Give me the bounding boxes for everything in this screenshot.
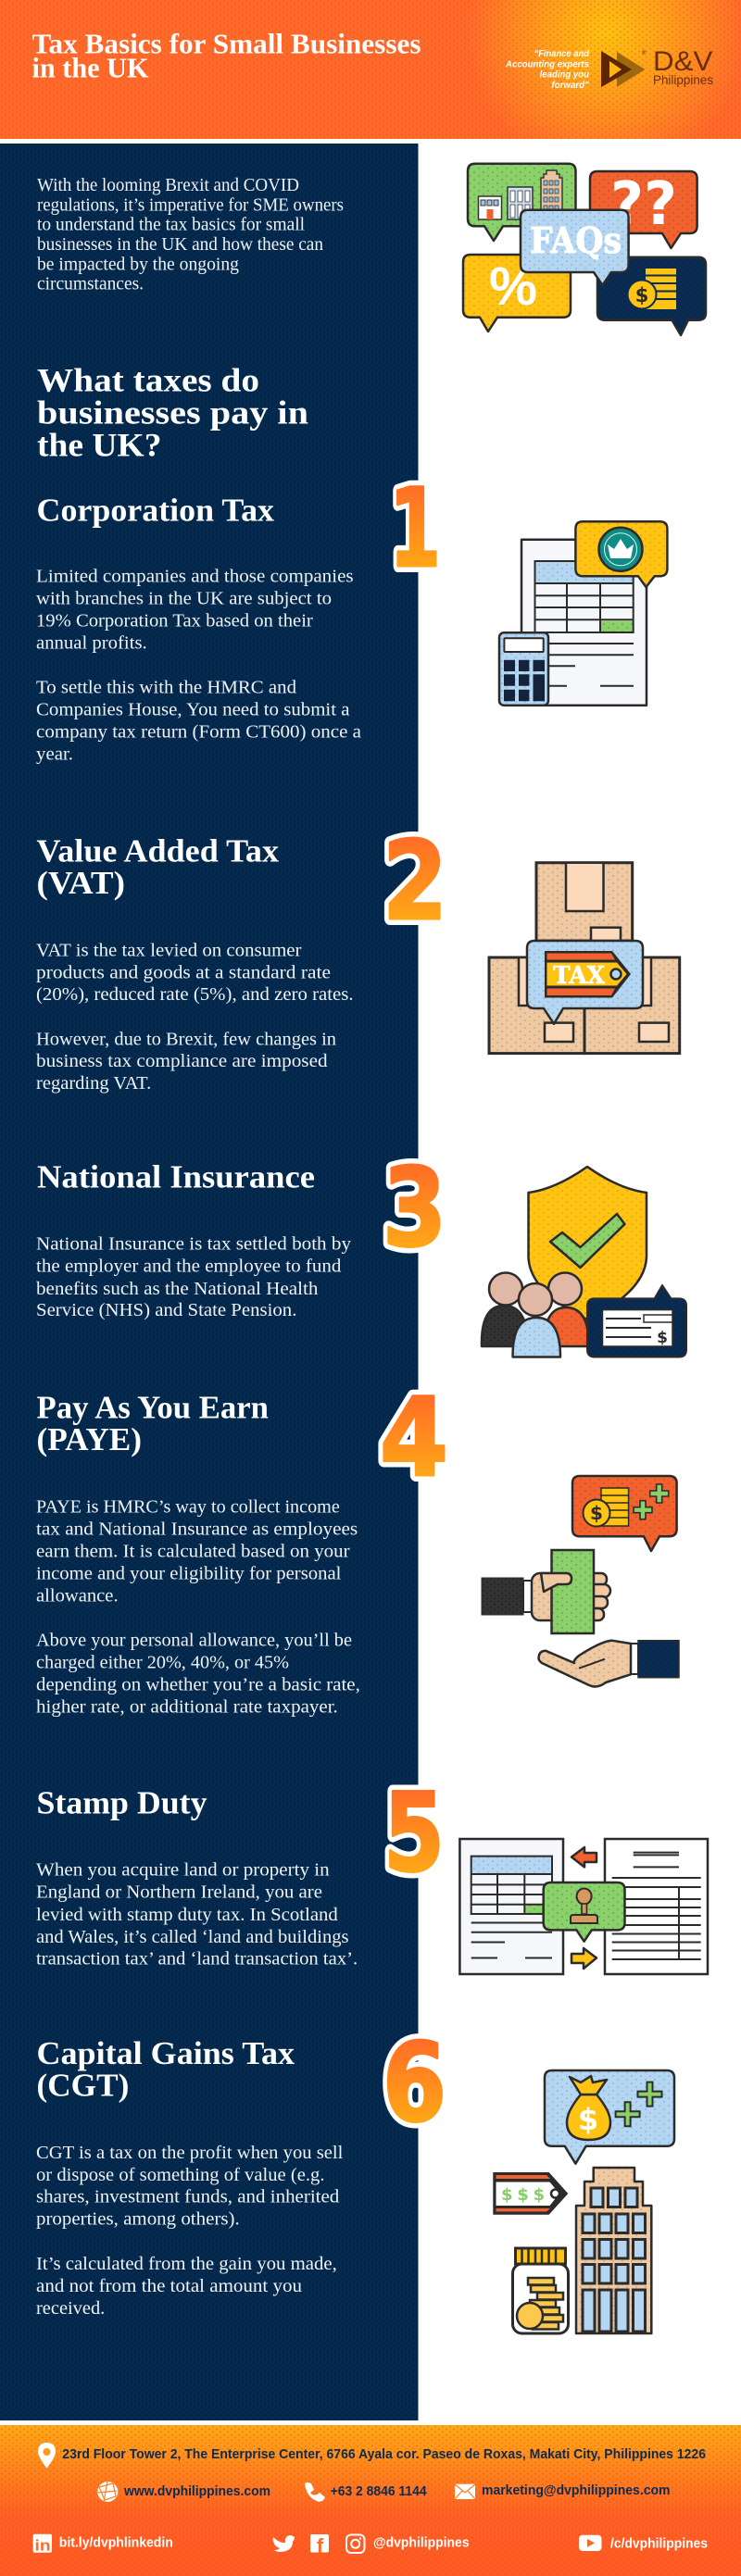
heading: what taxes do businesses pay: businesses pay in bbox=[37, 394, 308, 431]
number 1: 1 bbox=[389, 465, 441, 592]
footer: Facebook icon bbox=[310, 2534, 329, 2557]
section 5: body text: When you acquire land or property in bbox=[36, 1859, 330, 1880]
orange bubble with coins and plus signs: $ bbox=[590, 1502, 603, 1524]
section 1: heading Corporation Tax: Corporation Tax bbox=[37, 493, 275, 529]
section 5: body text: England or Northern Ireland, you are bbox=[36, 1882, 322, 1903]
logo: D&V Philippines: ® bbox=[642, 50, 647, 56]
shield with check mark bbox=[528, 1167, 647, 1319]
number 3: 3 bbox=[383, 1144, 446, 1271]
blue bubble with tax tag: TAX bbox=[553, 962, 606, 990]
section 2: body text: business tax compliance are imposed bbox=[36, 1051, 328, 1071]
footer: Instagram with handle bbox=[346, 2535, 470, 2553]
building bbox=[576, 2168, 651, 2333]
footer: Facebook icon: f bbox=[317, 2535, 324, 2557]
arrows bbox=[571, 1847, 597, 1969]
section 6: body text: or dispose of something of value (e.g. bbox=[36, 2165, 325, 2185]
section 3: body text: Service (NHS) and State Pension. bbox=[36, 1300, 296, 1320]
section 5: body text: levied with stamp duty tax. In Scotland bbox=[36, 1905, 338, 1925]
right document bbox=[605, 1839, 708, 1974]
section 6: body text: properties, among others). bbox=[36, 2209, 240, 2230]
green bubble with stamp bbox=[544, 1882, 624, 1942]
heading: what taxes do businesses pay bbox=[37, 362, 308, 463]
number 5: 5 bbox=[383, 1769, 445, 1896]
section 1: body text: 19% Corporation Tax based on their bbox=[36, 610, 313, 631]
section 6: body text: shares, investment funds, and inherited bbox=[36, 2187, 339, 2207]
company tagline: forward” bbox=[551, 80, 590, 91]
number 1 bbox=[389, 465, 441, 592]
icon: boxes with tax tag bbox=[489, 863, 680, 1054]
number 4: 4 bbox=[380, 1374, 448, 1501]
footer: email: marketing@dvphilippines.com bbox=[482, 2482, 671, 2498]
section 3: body text: National Insurance is tax settled both by bbox=[36, 1234, 351, 1255]
intro text: be impacted by the ongoing bbox=[37, 256, 239, 275]
title bbox=[31, 27, 421, 83]
section 1: body text: Limited companies and those companies bbox=[36, 566, 354, 586]
footer band bbox=[0, 2425, 741, 2576]
yellow bubble with crown seal bbox=[575, 521, 667, 587]
company tagline: leading you bbox=[540, 69, 590, 81]
section 2: body text bbox=[36, 940, 354, 1094]
section 2: heading VAT: (VAT) bbox=[37, 865, 125, 901]
intro text: circumstances. bbox=[37, 274, 144, 294]
section 1: body text: year. bbox=[36, 744, 73, 764]
blue bubble with FAQs: FAQs bbox=[530, 219, 622, 261]
company tagline: “Finance and bbox=[534, 48, 590, 59]
section 2: heading VAT: Value Added Tax bbox=[37, 833, 280, 869]
footer: YouTube bbox=[579, 2535, 708, 2552]
price tag: $$$ bbox=[501, 2185, 545, 2205]
company tagline bbox=[505, 48, 590, 91]
section 4: body text: tax and National Insurance as employees bbox=[36, 1519, 358, 1539]
section 6: body text: It’s calculated from the gain you made, bbox=[36, 2254, 337, 2274]
three people bbox=[482, 1272, 589, 1357]
section 2: body text: However, due to Brexit, few changes in bbox=[36, 1029, 336, 1049]
yellow bubble with percent: % bbox=[489, 256, 537, 317]
section 2: heading VAT bbox=[37, 833, 280, 901]
lower receiving hand bbox=[539, 1641, 679, 1686]
footer: LinkedIn: bit.ly/dvphlinkedin bbox=[59, 2535, 173, 2551]
navy bubble with cheque: $ bbox=[657, 1329, 668, 1347]
section 6: body text: received. bbox=[36, 2298, 105, 2319]
orange bubble with question marks bbox=[590, 170, 697, 248]
orange bubble with question marks: ?? bbox=[610, 170, 677, 239]
title: Tax Basics for Small Businesses bbox=[31, 27, 421, 59]
section 1: body text: To settle this with the HMRC and bbox=[36, 677, 296, 697]
heading: what taxes do businesses pay: the UK? bbox=[37, 426, 161, 463]
orange bubble with coins and plus signs bbox=[572, 1476, 677, 1551]
panel: navy text column bbox=[0, 144, 419, 2420]
footer: address with pin icon bbox=[38, 2443, 706, 2469]
section 4: body text bbox=[36, 1496, 360, 1717]
section 6: body text bbox=[36, 2143, 344, 2319]
footer: LinkedIn: in bbox=[35, 2537, 50, 2554]
coin jar bbox=[513, 2248, 569, 2333]
number 3: 3 bbox=[383, 1144, 446, 1271]
section 5: body text: and Wales, it’s called ‘land and buildings bbox=[36, 1927, 349, 1947]
blue bubble with money bag bbox=[545, 2070, 674, 2164]
section 4: body text: allowance. bbox=[36, 1585, 119, 1606]
footer: Twitter icon bbox=[273, 2535, 295, 2552]
intro text: to understand the tax basics for small bbox=[37, 215, 306, 235]
logo: D&V Philippines bbox=[601, 46, 713, 87]
heading: what taxes do businesses pay: What taxes do bbox=[37, 362, 259, 399]
section 1: body text: Companies House, You need to submit a bbox=[36, 699, 350, 719]
title: in the UK bbox=[31, 51, 148, 83]
icon: money bag, price tag, coin jar and building bbox=[493, 2070, 674, 2333]
section 6: body text: and not from the total amount you bbox=[36, 2276, 302, 2296]
intro text: With the looming Brexit and COVID bbox=[37, 176, 299, 195]
green bubble with buildings bbox=[468, 164, 576, 241]
section 5: heading Stamp Duty: Stamp Duty bbox=[37, 1784, 207, 1820]
number 5: 5 bbox=[383, 1769, 445, 1896]
footer: website: www.dvphilippines.com bbox=[123, 2483, 270, 2499]
left document bbox=[459, 1839, 563, 1974]
section 1: body text bbox=[36, 566, 361, 764]
intro text bbox=[37, 176, 344, 294]
price tag bbox=[493, 2172, 568, 2215]
calculator bbox=[499, 632, 548, 706]
section 4: body text: income and your eligibility for personal bbox=[36, 1563, 342, 1583]
footer: YouTube: /c/dvphilippines bbox=[610, 2536, 708, 2552]
section 1: body text: company tax return (Form CT600) once a bbox=[36, 721, 361, 742]
number 6: 6 bbox=[383, 2020, 446, 2146]
number 2: 2 bbox=[383, 818, 447, 944]
section 4: body text: earn them. It is calculated based on your bbox=[36, 1541, 350, 1561]
logo: D&V Philippines: D&V bbox=[653, 46, 712, 77]
navy bubble with coins: $ bbox=[635, 284, 648, 306]
section 2: body text: VAT is the tax levied on consumer bbox=[36, 940, 302, 960]
section 5: body text bbox=[36, 1859, 358, 1970]
blue bubble with FAQs bbox=[521, 210, 629, 285]
section 6: body text: CGT is a tax on the profit when you sell bbox=[36, 2143, 344, 2163]
section 3: heading National Insurance: National Insurance bbox=[37, 1159, 315, 1195]
icon: hands exchanging money bbox=[482, 1476, 679, 1686]
number 6: 6 bbox=[383, 2020, 446, 2146]
section 4: heading PAYE: Pay As You Earn bbox=[37, 1389, 269, 1425]
section 4: body text: higher rate, or additional rate taxpayer. bbox=[36, 1696, 338, 1717]
section 6: heading CGT: Capital Gains Tax bbox=[37, 2035, 295, 2071]
footer: Instagram with handle: @dvphilippines bbox=[373, 2535, 470, 2551]
section 4: body text: Above your personal allowance, you’ll be bbox=[36, 1630, 352, 1650]
number 1: 1 bbox=[389, 465, 441, 592]
number 2: 2 bbox=[383, 818, 447, 944]
section 1: body text: with branches in the UK are subject to bbox=[36, 588, 332, 608]
section 6: heading CGT: (CGT) bbox=[37, 2067, 129, 2104]
upper hand holding bill bbox=[482, 1550, 610, 1633]
section 4: body text: depending on whether you’re a basic rate, bbox=[36, 1674, 360, 1694]
icon: shield with people and cheque bbox=[482, 1167, 686, 1357]
logo: D&V Philippines: Philippines bbox=[653, 72, 713, 87]
number 4: 4 bbox=[380, 1374, 448, 1501]
company tagline: Accounting experts bbox=[505, 58, 589, 69]
section 4: heading PAYE bbox=[37, 1389, 269, 1457]
icon: FAQ speech bubbles bbox=[463, 164, 706, 335]
yellow bubble with percent bbox=[463, 255, 571, 331]
section 3: body text: the employer and the employee to fund bbox=[36, 1256, 341, 1276]
section 2: body text: (20%), reduced rate (5%), and zero rates. bbox=[36, 984, 354, 1005]
blue bubble with tax tag bbox=[527, 941, 643, 1024]
section 5: body text: transaction tax’ and ‘land transaction tax’. bbox=[36, 1949, 358, 1970]
section 4: heading PAYE: (PAYE) bbox=[37, 1421, 142, 1457]
section 1: body text: annual profits. bbox=[36, 632, 147, 653]
intro text: regulations, it’s imperative for SME owners bbox=[37, 195, 344, 215]
header banner bbox=[0, 0, 741, 139]
blue bubble with money bag: $ bbox=[578, 2102, 598, 2137]
footer: address with pin icon: 23rd Floor Tower 2, The Enterprise Center, 6766 Ayala cor. Paseo de Roxas, Makati City, Philippines 1226 bbox=[62, 2446, 706, 2462]
footer: phone bbox=[305, 2482, 427, 2502]
section 6: heading CGT bbox=[37, 2035, 295, 2104]
icon: documents with stamp bbox=[459, 1839, 708, 1974]
section 2: body text: regarding VAT. bbox=[36, 1073, 151, 1094]
section 3: body text: benefits such as the National Health bbox=[36, 1279, 318, 1299]
icon: tax form with calculator and crown bubble bbox=[499, 521, 667, 706]
navy bubble with cheque bbox=[587, 1285, 686, 1357]
section 2: body text: products and goods at a standard rate bbox=[36, 962, 331, 982]
footer: website bbox=[97, 2482, 270, 2502]
section 3: body text bbox=[36, 1234, 351, 1320]
footer: phone: +63 2 8846 1144 bbox=[331, 2483, 427, 2499]
footer: LinkedIn bbox=[33, 2534, 173, 2554]
intro text: businesses in the UK and how these can bbox=[37, 235, 323, 255]
section 4: body text: PAYE is HMRC’s way to collect income bbox=[36, 1496, 340, 1517]
section 4: body text: charged either 20%, 40%, or 45% bbox=[36, 1652, 289, 1672]
navy bubble with coins bbox=[597, 257, 706, 335]
